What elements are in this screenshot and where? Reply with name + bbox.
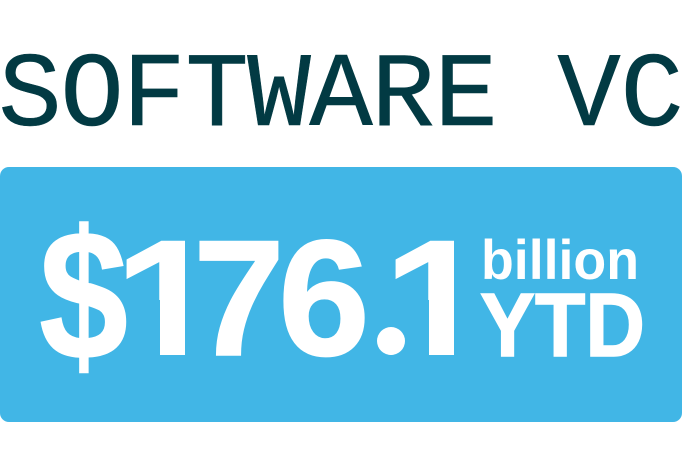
amount: $ — [39, 192, 128, 399]
amount — [40, 221, 454, 374]
amount: 6 — [278, 206, 370, 390]
panel: software VC total — [0, 167, 682, 422]
amount: 7 — [193, 206, 285, 390]
amount: . — [349, 83, 433, 419]
amount: 1 — [383, 206, 493, 390]
unit: billion: billion — [481, 228, 639, 291]
infographic — [0, 54, 682, 422]
title: SOFTWAREVC — [0, 37, 684, 157]
amount: 1 — [114, 206, 224, 390]
period: YTD: YTD — [480, 276, 645, 376]
